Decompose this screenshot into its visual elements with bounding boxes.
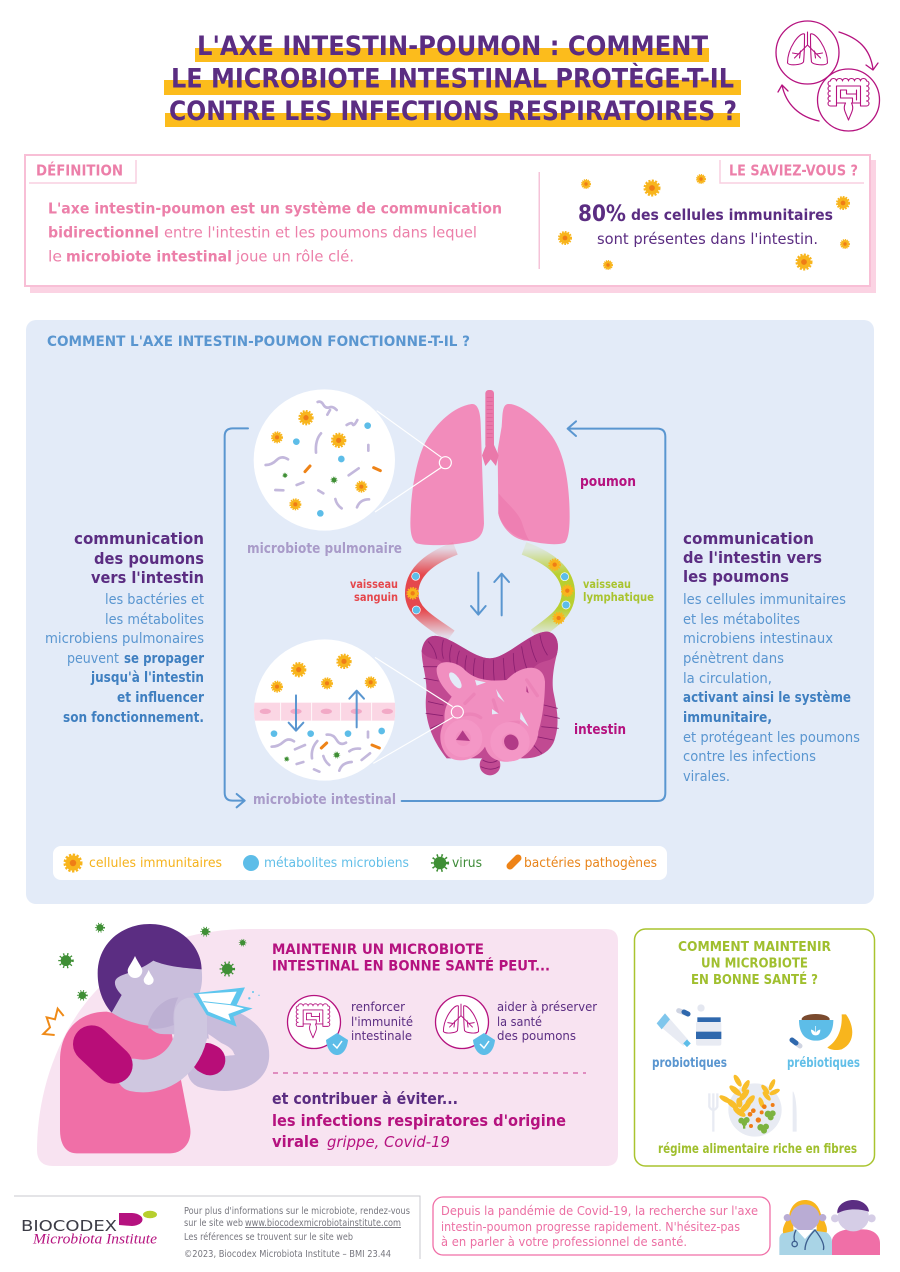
title: CONTRE LES INFECTIONS RESPIRATOIRES ?: [169, 96, 737, 127]
legend: virus: virus: [452, 856, 482, 871]
footer info text: ©2023, Biocodex Microbiota Institute – BMI 23.44: [184, 1249, 391, 1260]
heading: EN BONNE SANTÉ ?: [691, 972, 818, 988]
heading: COMMENT MAINTENIR: [678, 940, 831, 955]
diagram: lung and gut axis: [225, 389, 665, 807]
text: contribution: les infections respiratores d'origine: [272, 1111, 566, 1130]
text: contribution: et contribuer à éviter...: [272, 1089, 458, 1108]
right column text: virales.: [683, 769, 730, 785]
callout: consult your health professional: Depuis la pandémie de Covid-19, la recherche sur l'axe: [441, 1203, 758, 1218]
definition text: [48, 200, 502, 266]
right column text: de l'intestin vers: [683, 548, 822, 567]
logo: Microbiota Institute: [32, 1232, 157, 1248]
arrows: bidirectional: [471, 573, 509, 615]
label: pulmonary microbiota: microbiote pulmonaire: [247, 541, 402, 557]
legend: pathogenic bacteria: bactéries pathogènes: [524, 856, 657, 871]
icon: fibre-rich plate: [709, 1074, 797, 1137]
zoom callout: intestine: [373, 657, 463, 763]
callout: consult your health professional: [433, 1197, 770, 1255]
microbiota circle: intestinal: [253, 639, 397, 781]
footer info text: Les références se trouvent sur le site web: [184, 1232, 353, 1243]
illustration: sneezing person: [43, 923, 260, 1153]
label: blood vessel: vaisseau: [350, 577, 398, 591]
did you know text: des cellules immunitaires: [631, 206, 833, 224]
did you know text: [578, 202, 833, 248]
right column text: et protégeant les poumons: [683, 730, 860, 746]
left column text: jusqu'à l'intestin: [90, 670, 204, 686]
label: intestinal microbiota: microbiote intestinal: [253, 792, 396, 808]
text: strengthen immunity: intestinale: [351, 1029, 412, 1043]
text: contribution: virale: [272, 1132, 319, 1151]
immune cell decorations: [559, 175, 849, 269]
text: strengthen immunity: renforcer: [351, 1000, 405, 1014]
vessel: lymphatic: [524, 548, 568, 635]
text: preserve lung health: [497, 1000, 597, 1043]
heading: [678, 940, 831, 988]
heading: INTESTINAL EN BONNE SANTÉ PEUT...: [272, 958, 550, 974]
arrow: feedback loop frame: [225, 421, 665, 807]
text: contribution: grippe, Covid-19: [327, 1133, 450, 1151]
footer: [14, 1196, 880, 1260]
did you know text: 80%: [578, 202, 626, 227]
left column text: et influencer: [117, 690, 204, 706]
left column text: son fonctionnement.: [63, 710, 204, 726]
definition text: L'axe intestin-poumon est un système de communication: [48, 200, 502, 218]
label: blood vessel: [350, 577, 398, 604]
panel: definition: [25, 155, 876, 293]
panel heading: COMMENT L'AXE INTESTIN-POUMON FONCTIONNE-T-IL ?: [47, 334, 470, 350]
definition text: entre l'intestin et les poumons dans lequel: [164, 224, 477, 242]
panel: maintaining a healthy microbiota: [37, 923, 618, 1166]
left column text: microbiens pulmonaires: [45, 631, 204, 647]
label: probiotics: probiotiques: [652, 1056, 727, 1071]
text: preserve lung health: la santé: [497, 1015, 542, 1029]
left column text: peuvent: [67, 651, 119, 667]
legend: virus: [432, 855, 482, 871]
text: strengthen immunity: [351, 1000, 413, 1043]
left column text: des poumons: [94, 549, 204, 568]
zoom callout: lung: [375, 411, 451, 512]
right column text: [683, 529, 860, 785]
title: LE MICROBIOTE INTESTINAL PROTÈGE-T-IL: [171, 62, 734, 94]
illustration: doctor and patient: [779, 1200, 880, 1255]
label: lymphatic vessel: lymphatique: [583, 590, 654, 604]
panel: how to maintain microbiota: [634, 929, 874, 1166]
logo: [21, 1211, 157, 1248]
illustrations: supplements: [657, 1004, 852, 1050]
right column text: immunitaire,: [683, 710, 772, 726]
right column text: microbiens intestinaux: [683, 631, 833, 647]
left column text: les métabolites: [105, 612, 204, 628]
label: lymphatic vessel: vaisseau: [583, 577, 631, 591]
icon: lungs with shield: [436, 996, 495, 1055]
right column text: activant ainsi le système: [683, 690, 851, 706]
definition label: DÉFINITION: [36, 160, 123, 180]
text: strengthen immunity: l'immunité: [351, 1015, 413, 1029]
definition text: microbiote intestinal: [66, 248, 232, 266]
footer info text: sur le site web: [184, 1218, 243, 1229]
definition text: bidirectionnel: [48, 224, 159, 242]
right column text: pénètrent dans: [683, 651, 784, 667]
callout: consult your health professional: intestin-poumon progresse rapidement. N'hésitez-pas: [441, 1219, 740, 1234]
label: lung: poumon: [580, 474, 636, 490]
vessel contents: [407, 559, 573, 623]
icon: prebiotics: [792, 1014, 852, 1050]
vessel: blood: [412, 548, 455, 636]
footer info text: www.biocodexmicrobiotainstitute.com: [245, 1218, 401, 1229]
definition text: le: [48, 248, 62, 266]
panel: how the axis works: [26, 320, 874, 904]
icon: lungs and intestine cycle: [776, 21, 880, 131]
left column text: se propager: [124, 651, 204, 667]
legend: metabolites: métabolites microbiens: [264, 856, 409, 871]
heading: UN MICROBIOTE: [701, 956, 808, 972]
label: blood vessel: sanguin: [354, 590, 398, 604]
footer info text: Pour plus d'informations sur le microbiote, rendez-vous: [184, 1206, 410, 1217]
did you know label: LE SAVIEZ-VOUS ?: [729, 162, 858, 180]
icon: probiotics: [657, 1004, 721, 1047]
legend: [53, 846, 667, 880]
callout: consult your health professional: à en parler à votre professionnel de santé.: [441, 1234, 687, 1249]
right column text: les cellules immunitaires: [683, 592, 846, 608]
left column text: vers l'intestin: [91, 568, 204, 587]
right column text: communication: [683, 529, 814, 548]
intestine: [422, 632, 559, 775]
microbiota circle: pulmonary: [254, 389, 395, 531]
left column text: communication: [74, 529, 204, 548]
right column text: les poumons: [683, 567, 789, 586]
text: contribution: [272, 1089, 566, 1151]
icon: intestine with shield: [288, 996, 348, 1055]
did you know text: sont présentes dans l'intestin.: [597, 230, 818, 248]
logo: BIOCODEX: [21, 1217, 117, 1235]
left column text: [45, 529, 204, 726]
title: L'AXE INTESTIN-POUMON : COMMENT: [197, 31, 709, 62]
footer info text: [184, 1206, 410, 1260]
heading: [272, 942, 550, 974]
text: preserve lung health: des poumons: [497, 1029, 576, 1043]
title: [164, 31, 741, 127]
label: prebiotics: prébiotiques: [787, 1056, 860, 1071]
left column text: les bactéries et: [105, 592, 204, 608]
label: intestine: intestin: [574, 722, 626, 738]
right column text: et les métabolites: [683, 612, 800, 628]
label: lymphatic vessel: [583, 577, 654, 604]
right column text: la circulation,: [683, 671, 772, 687]
legend: immune cells: cellules immunitaires: [89, 856, 222, 871]
lungs: [410, 390, 570, 545]
definition text: joue un rôle clé.: [235, 248, 354, 266]
heading: MAINTENIR UN MICROBIOTE: [272, 942, 484, 958]
right column text: contre les infections: [683, 749, 816, 765]
text: preserve lung health: aider à préserver: [497, 1000, 597, 1014]
